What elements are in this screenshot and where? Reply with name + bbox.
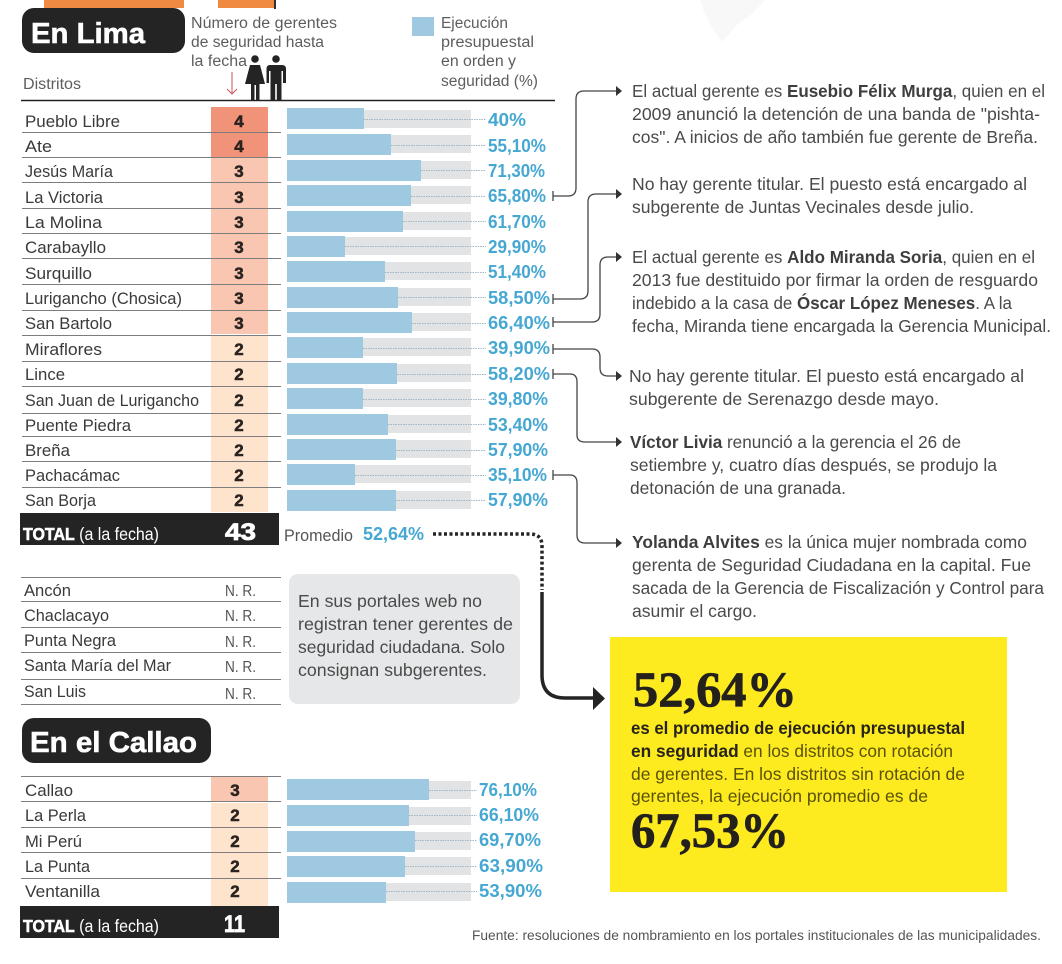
callout: yellow average box: de gerentes. En los distritos sin rotación de bbox=[631, 764, 965, 784]
table: districts without data: N. R. bbox=[225, 686, 256, 703]
table: Callao districts: Mi Perú bbox=[25, 832, 82, 851]
manager counts: 2 bbox=[234, 391, 244, 410]
district names: Ate bbox=[25, 137, 52, 156]
callout: yellow average box: gerentes, la ejecución promedio es de bbox=[631, 786, 928, 806]
percentage values: 57,90% bbox=[488, 440, 548, 460]
note: Víctor Livia: setiembre y, cuatro días después, se produjo la bbox=[630, 455, 997, 475]
note: Eusebio Félix Murga bbox=[632, 81, 1045, 147]
column header: number of managers: la fecha bbox=[191, 53, 247, 70]
note: Serenazgo: subgerente de Serenazgo desde mayo. bbox=[629, 389, 939, 409]
percentage values: 65,80% bbox=[488, 186, 546, 206]
table: districts without data: Santa María del Mar bbox=[24, 656, 171, 675]
note: Aldo Miranda Soria: 2013 fue destituido por firmar la orden de resguardo bbox=[632, 270, 1038, 290]
table: Callao districts: 2 bbox=[230, 832, 240, 851]
note: Yolanda Alvites bbox=[632, 532, 1044, 621]
table: districts without data: Ancón bbox=[24, 581, 71, 600]
source note: Fuente: resoluciones de nombramiento en los portales institucionales de las municipalidades. bbox=[472, 928, 1041, 943]
district names: San Bartolo bbox=[25, 314, 112, 333]
percentage values: 61,70% bbox=[488, 212, 546, 232]
table: Callao districts: La Perla bbox=[25, 806, 87, 825]
connector arrow: Lurigancho Chosica bbox=[553, 189, 622, 304]
table: Callao districts: 76,10% bbox=[479, 780, 537, 800]
note: Serenazgo bbox=[629, 366, 1024, 409]
note box: no managers registered bbox=[289, 574, 520, 704]
total row: Lima: 43 bbox=[225, 519, 256, 546]
percentage values: 35,10% bbox=[488, 465, 547, 485]
note: Aldo Miranda Soria: El actual gerente es Aldo Miranda Soria, quien en el bbox=[632, 247, 1035, 267]
table: Callao districts: 63,90% bbox=[479, 856, 543, 876]
note: Aldo Miranda Soria: indebido a la casa de Óscar López Meneses. A la bbox=[632, 292, 1012, 313]
total row: Callao: TOTAL (a la fecha) bbox=[23, 916, 159, 936]
note: Víctor Livia: Víctor Livia renunció a la gerencia el 26 de bbox=[630, 432, 961, 452]
table: Callao districts: 69,70% bbox=[479, 830, 541, 850]
table: Callao districts: Ventanilla bbox=[25, 882, 101, 901]
table: Callao districts: 66,10% bbox=[479, 805, 539, 825]
percentage values: 39,80% bbox=[488, 389, 548, 409]
table: districts without data: N. R. bbox=[225, 659, 256, 676]
heading: En Lima bbox=[22, 8, 185, 53]
legend: budget execution: en orden y bbox=[441, 53, 516, 70]
table: Callao districts: 53,90% bbox=[479, 881, 542, 901]
note: Yolanda Alvites: Yolanda Alvites es la única mujer nombrada como bbox=[632, 532, 1027, 552]
arrow: average to yellow callout bbox=[433, 534, 605, 710]
percentage values: 51,40% bbox=[488, 262, 546, 282]
table: Callao districts: La Punta bbox=[25, 857, 91, 876]
manager counts bbox=[234, 112, 244, 510]
bar chart: Lima budget execution bbox=[287, 108, 486, 511]
note: Juntas Vecinales bbox=[632, 174, 1027, 217]
note: Juntas Vecinales: No hay gerente titular. El puesto está encargado al bbox=[632, 174, 1027, 194]
district names: Jesús María bbox=[25, 162, 114, 181]
district names: Puente Piedra bbox=[25, 416, 132, 435]
note box: no managers registered: En sus portales web no bbox=[298, 591, 482, 611]
table: districts without data: N. R. bbox=[225, 608, 256, 625]
district names bbox=[25, 112, 199, 510]
table: Callao districts: 3 bbox=[230, 781, 240, 800]
manager counts: 2 bbox=[234, 340, 244, 359]
manager counts: 3 bbox=[234, 213, 244, 232]
total row: Callao bbox=[20, 906, 279, 938]
table: districts without data bbox=[21, 578, 281, 704]
total row: Lima bbox=[20, 513, 279, 546]
icon: woman and man bbox=[245, 55, 286, 100]
note: Víctor Livia: detonación de una granada. bbox=[630, 478, 846, 498]
note: Víctor Livia bbox=[630, 432, 997, 498]
district names: Breña bbox=[25, 441, 71, 460]
manager counts: 4 bbox=[234, 137, 244, 156]
percentage values: 40% bbox=[488, 110, 526, 130]
legend: budget execution: seguridad (%) bbox=[441, 73, 538, 90]
heading: En Lima: En Lima bbox=[31, 18, 146, 50]
note: Eusebio Félix Murga: El actual gerente es Eusebio Félix Murga, quien en el bbox=[632, 81, 1045, 101]
heading: En el Callao bbox=[22, 718, 211, 763]
note: Aldo Miranda Soria: fecha, Miranda tiene encargada la Gerencia Municipal. bbox=[632, 316, 1051, 336]
note: Eusebio Félix Murga: cos". A inicios de año también fue gerente de Breña. bbox=[632, 127, 1038, 147]
manager counts: 2 bbox=[234, 416, 244, 435]
table: districts without data: N. R. bbox=[225, 634, 256, 651]
legend: budget execution: presupuestal bbox=[441, 34, 534, 51]
note box: no managers registered: consignan subgerentes. bbox=[298, 660, 487, 680]
note: Aldo Miranda Soria bbox=[632, 247, 1051, 336]
percentage values: 58,50% bbox=[488, 288, 550, 308]
column header: number of managers: Número de gerentes bbox=[191, 15, 337, 32]
manager counts: 2 bbox=[234, 466, 244, 485]
district names: San Juan de Lurigancho bbox=[25, 391, 199, 410]
note box: no managers registered: seguridad ciudadana. Solo bbox=[298, 637, 505, 657]
table: districts without data: San Luis bbox=[24, 682, 86, 701]
top photo fragments bbox=[44, 0, 276, 9]
note: Yolanda Alvites: asumir el cargo. bbox=[632, 601, 757, 621]
connector arrow: Lince bbox=[553, 369, 622, 447]
column header: number of managers bbox=[191, 15, 337, 70]
average label: 52,64% bbox=[363, 524, 424, 544]
callout: yellow average box: 67,53% bbox=[631, 802, 789, 858]
table: districts without data: Punta Negra bbox=[24, 631, 117, 650]
percentage values: 57,90% bbox=[488, 490, 548, 510]
note: Yolanda Alvites: sacada de la Gerencia de Fiscalización y Control para bbox=[632, 578, 1044, 598]
connector arrow: La Victoria bbox=[553, 86, 622, 201]
table: Callao districts: 2 bbox=[230, 806, 240, 825]
connector arrow: Miraflores bbox=[553, 344, 622, 381]
percentage values: 39,90% bbox=[488, 338, 550, 358]
percentage values: 58,20% bbox=[488, 364, 550, 384]
manager counts: 3 bbox=[234, 264, 244, 283]
district names: Pueblo Libre bbox=[25, 112, 120, 131]
percentage values: 66,40% bbox=[488, 313, 550, 333]
callout: yellow average box: en seguridad en los distritos con rotación bbox=[631, 741, 953, 761]
manager count cells bbox=[211, 107, 268, 512]
district names: La Molina bbox=[25, 213, 103, 232]
connector arrow: Pachacamac bbox=[553, 470, 622, 548]
column header: Distritos: Distritos bbox=[23, 76, 81, 93]
district names: Miraflores bbox=[25, 340, 102, 359]
district names: Surquillo bbox=[25, 264, 92, 283]
manager counts: 4 bbox=[234, 112, 244, 131]
bar chart: Callao budget execution bbox=[287, 779, 477, 903]
manager counts: 2 bbox=[234, 441, 244, 460]
average label bbox=[284, 524, 424, 545]
faint map fragment bbox=[700, 0, 765, 42]
district names: La Victoria bbox=[25, 188, 104, 207]
heading: En el Callao: En el Callao bbox=[30, 727, 197, 759]
percentage values bbox=[488, 110, 550, 510]
district names: Lince bbox=[25, 365, 65, 384]
manager counts: 3 bbox=[234, 314, 244, 333]
total row: Callao: 11 bbox=[224, 911, 245, 938]
district names: San Borja bbox=[25, 491, 97, 510]
table: districts without data: Chaclacayo bbox=[24, 606, 109, 625]
manager counts: 2 bbox=[234, 491, 244, 510]
note box: no managers registered: registran tener gerentes de bbox=[298, 614, 513, 634]
connector arrow: San Bartolo bbox=[553, 252, 622, 327]
total row: Lima: TOTAL (a la fecha) bbox=[23, 524, 159, 544]
callout: yellow average box: 52,64% bbox=[633, 661, 797, 717]
callout: yellow average box: es el promedio de ejecución presupuestal bbox=[631, 718, 965, 738]
table: Callao districts: Callao bbox=[25, 781, 73, 800]
note: Eusebio Félix Murga: 2009 anunció la detención de una banda de "pishta- bbox=[632, 104, 1040, 124]
note: Juntas Vecinales: subgerente de Juntas Vecinales desde julio. bbox=[632, 197, 974, 217]
percentage values: 71,30% bbox=[488, 161, 545, 181]
column header: number of managers: de seguridad hasta bbox=[191, 34, 324, 51]
table: Callao districts: 2 bbox=[230, 857, 240, 876]
note: Yolanda Alvites: gerenta de Seguridad Ciudadana en la capital. Fue bbox=[632, 555, 1031, 575]
icon: red down arrow bbox=[227, 72, 237, 94]
district names: Pachacámac bbox=[25, 466, 120, 485]
note: Serenazgo: No hay gerente titular. El puesto está encargado al bbox=[629, 366, 1024, 386]
manager counts: 3 bbox=[234, 162, 244, 181]
legend: budget execution: Ejecución bbox=[441, 15, 508, 32]
average label: Promedio bbox=[284, 527, 353, 545]
manager counts: 2 bbox=[234, 365, 244, 384]
percentage values: 53,40% bbox=[488, 415, 548, 435]
district names: Lurigancho (Chosica) bbox=[25, 289, 182, 308]
table: districts without data: N. R. bbox=[225, 583, 256, 600]
district names: Carabayllo bbox=[25, 238, 106, 257]
percentage values: 29,90% bbox=[488, 237, 546, 257]
callout: yellow average box bbox=[610, 637, 1007, 892]
table: Callao districts: 2 bbox=[230, 882, 240, 901]
table: Callao districts bbox=[21, 776, 543, 907]
legend: budget execution bbox=[412, 15, 538, 90]
table: Lima districts bbox=[22, 107, 550, 512]
manager counts: 3 bbox=[234, 238, 244, 257]
manager counts: 3 bbox=[234, 289, 244, 308]
percentage values: 55,10% bbox=[488, 136, 546, 156]
manager counts: 3 bbox=[234, 188, 244, 207]
